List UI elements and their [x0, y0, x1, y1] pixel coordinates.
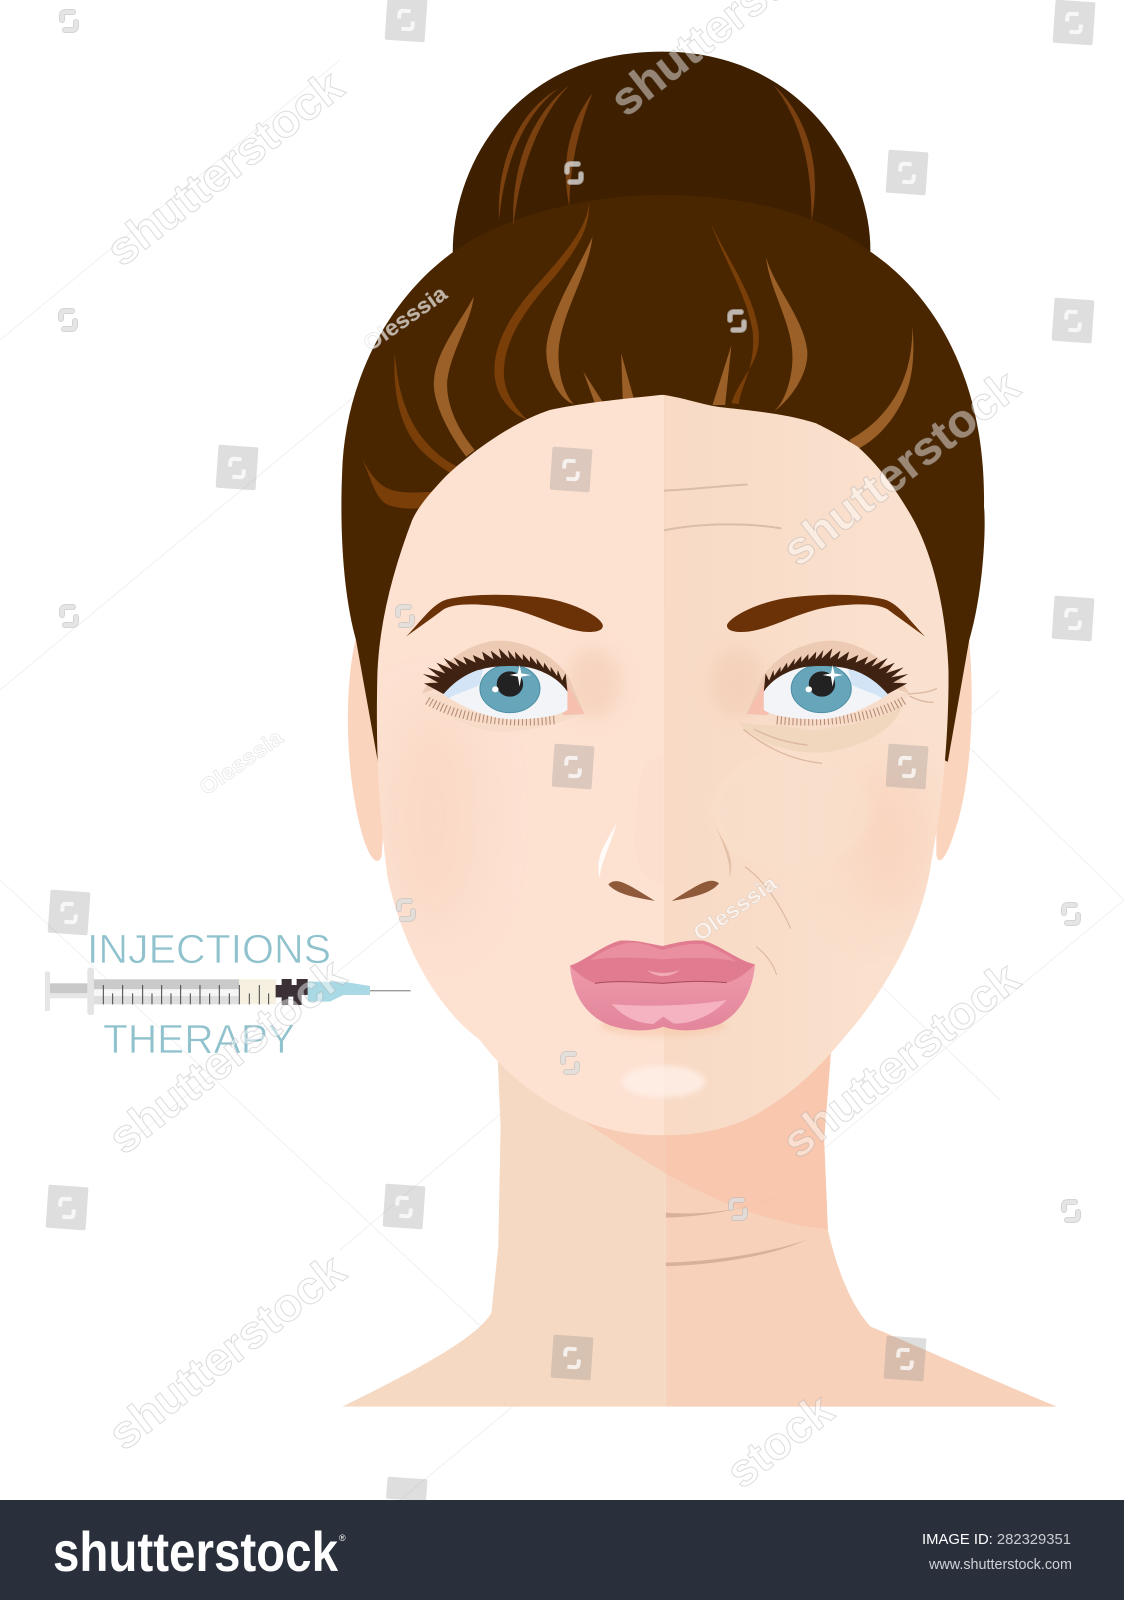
ears — [348, 638, 972, 861]
upper lid over iris — [479, 664, 540, 670]
under-eye bag — [738, 698, 904, 753]
watermark small outlined icons — [61, 12, 1078, 1220]
left eye and brow — [406, 595, 620, 732]
nostrils — [608, 881, 719, 901]
nasolabial wrinkles — [745, 867, 791, 975]
website: www.shutterstock.com — [928, 1557, 1072, 1573]
cheek shading: left — [404, 742, 463, 896]
syringe — [45, 968, 411, 1015]
upper lip highlight — [590, 943, 737, 962]
watermark: shutterstock text: shutterstock — [772, 359, 1029, 576]
nose side line — [714, 823, 731, 878]
title: injections: INJECTIONS — [87, 926, 331, 972]
barrel — [94, 979, 276, 1004]
neck: right half — [666, 1050, 1057, 1407]
pupil — [809, 671, 835, 697]
scale ticks — [103, 985, 269, 1004]
image id: IMAGE ID: 282329351 — [922, 1531, 1071, 1548]
neck shadow: right of centre — [666, 1050, 831, 1229]
face: left half smooth skin — [376, 394, 664, 1135]
chin highlight — [622, 1066, 705, 1098]
cupid's bow highlight — [647, 969, 680, 976]
ear: right — [936, 638, 972, 860]
iris — [791, 665, 851, 713]
lower lip highlight — [612, 1000, 727, 1024]
nose highlight — [598, 823, 617, 878]
pupil — [497, 671, 523, 697]
plunger — [45, 968, 94, 1015]
eyebrow — [727, 595, 925, 637]
watermark: author name — [195, 280, 782, 946]
watermark: author name: Olesssia — [359, 280, 452, 356]
lip shadow — [600, 1015, 727, 1037]
right eye and brow — [711, 595, 937, 763]
watermark: shutterstock text: shutterstock — [98, 1243, 355, 1460]
nose bridge shade — [635, 757, 663, 883]
lip parting line — [595, 981, 727, 983]
lower lip — [570, 964, 755, 1030]
cheek shading: right — [853, 781, 928, 904]
upper lip — [570, 940, 755, 984]
face: right half aged skin — [664, 388, 970, 1142]
eye highlights — [492, 665, 531, 692]
watermark: shutterstock text: shutterstock — [772, 951, 1029, 1168]
watermark: author name: Olesssia — [689, 870, 782, 946]
black stopper — [276, 979, 308, 1005]
neck — [342, 1050, 1057, 1407]
hair bun — [453, 52, 870, 253]
watermark: shutterstock text: shutterstock — [96, 59, 353, 276]
footer logo: shutterstock — [53, 1520, 339, 1583]
watermark: shutterstock text: shutterstock — [98, 947, 355, 1164]
upper lid over iris — [791, 664, 852, 670]
dark hair streaks — [362, 201, 759, 509]
bun streaks — [499, 85, 815, 227]
hair — [341, 52, 985, 762]
needle — [370, 989, 411, 993]
forehead wrinkles — [664, 484, 781, 530]
under-eye bag fold — [742, 707, 902, 752]
neck: left half — [342, 1050, 666, 1407]
hair main — [341, 195, 985, 762]
eye highlights — [806, 665, 843, 692]
under-eye and crow's feet wrinkles — [743, 688, 937, 763]
needle hub — [308, 982, 370, 1002]
nose, lips and chin — [570, 823, 791, 1098]
light hair streaks — [434, 237, 913, 457]
title: therapy: THERAPY — [103, 1016, 295, 1062]
registered mark: ® — [339, 1533, 346, 1543]
footer bar — [0, 1500, 1124, 1600]
eyebrow — [406, 595, 603, 637]
neck wrinkles — [666, 1194, 808, 1266]
watermark: shutterstock text — [96, 0, 1029, 1498]
neck shadow: left of centre — [573, 1107, 666, 1173]
watermark: shutterstock text: stock — [716, 1383, 843, 1498]
ear: left — [348, 638, 388, 861]
watermark: author name: Olesssia — [195, 724, 288, 800]
iris — [480, 665, 540, 713]
face — [347, 388, 970, 1142]
